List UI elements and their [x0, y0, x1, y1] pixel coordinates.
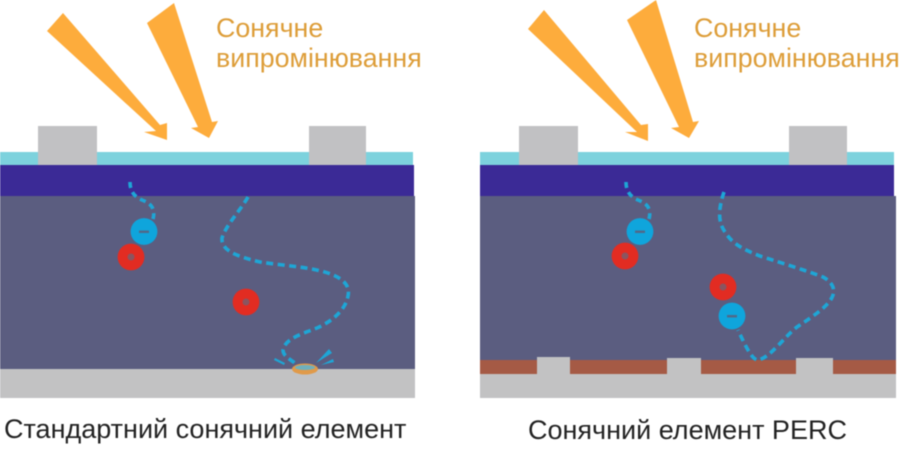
rear contact layer [0, 369, 415, 398]
front contact left [519, 126, 578, 165]
panel: standard solar cell [0, 3, 422, 444]
hole [710, 274, 736, 300]
electron [131, 218, 157, 245]
electron [627, 218, 653, 245]
recombination spot [274, 349, 334, 374]
heading: solar radiation: Сонячне [694, 13, 801, 43]
passivation layer [480, 360, 896, 374]
caption: standard solar cell: Стандартний сонячний елемент [4, 414, 406, 444]
heading: solar radiation line 2: випромінювання [216, 43, 422, 73]
rear contact openings [537, 357, 833, 375]
arrow: solar ray 1 [47, 13, 167, 140]
electron [719, 303, 745, 329]
dashed path: long electron path [222, 197, 348, 364]
caption: PERC solar cell: Сонячний елемент PERC [528, 415, 847, 445]
hole [118, 244, 144, 270]
front contact right [789, 126, 847, 165]
base layer [0, 196, 415, 369]
heading: solar radiation line 2: випромінювання [694, 43, 900, 73]
dashed path: short electron path [626, 182, 650, 219]
panel: PERC solar cell [480, 0, 900, 445]
front contact right [309, 126, 366, 165]
dashed path: short electron path [130, 182, 154, 219]
hole [233, 289, 259, 315]
dashed path: long electron path [720, 192, 834, 360]
hole [612, 243, 638, 269]
front contact left [38, 126, 97, 165]
base layer [480, 196, 896, 361]
rear contact layer [480, 374, 896, 398]
arrow: solar ray 2 [147, 3, 218, 138]
heading: solar radiation: Сонячне [216, 13, 323, 43]
arrow: solar ray 2 [627, 0, 699, 138]
emitter layer [0, 165, 414, 196]
anti-reflective layer [0, 152, 413, 165]
arrow: solar ray 1 [528, 10, 648, 141]
emitter layer [480, 165, 894, 196]
anti-reflective layer [480, 152, 894, 165]
